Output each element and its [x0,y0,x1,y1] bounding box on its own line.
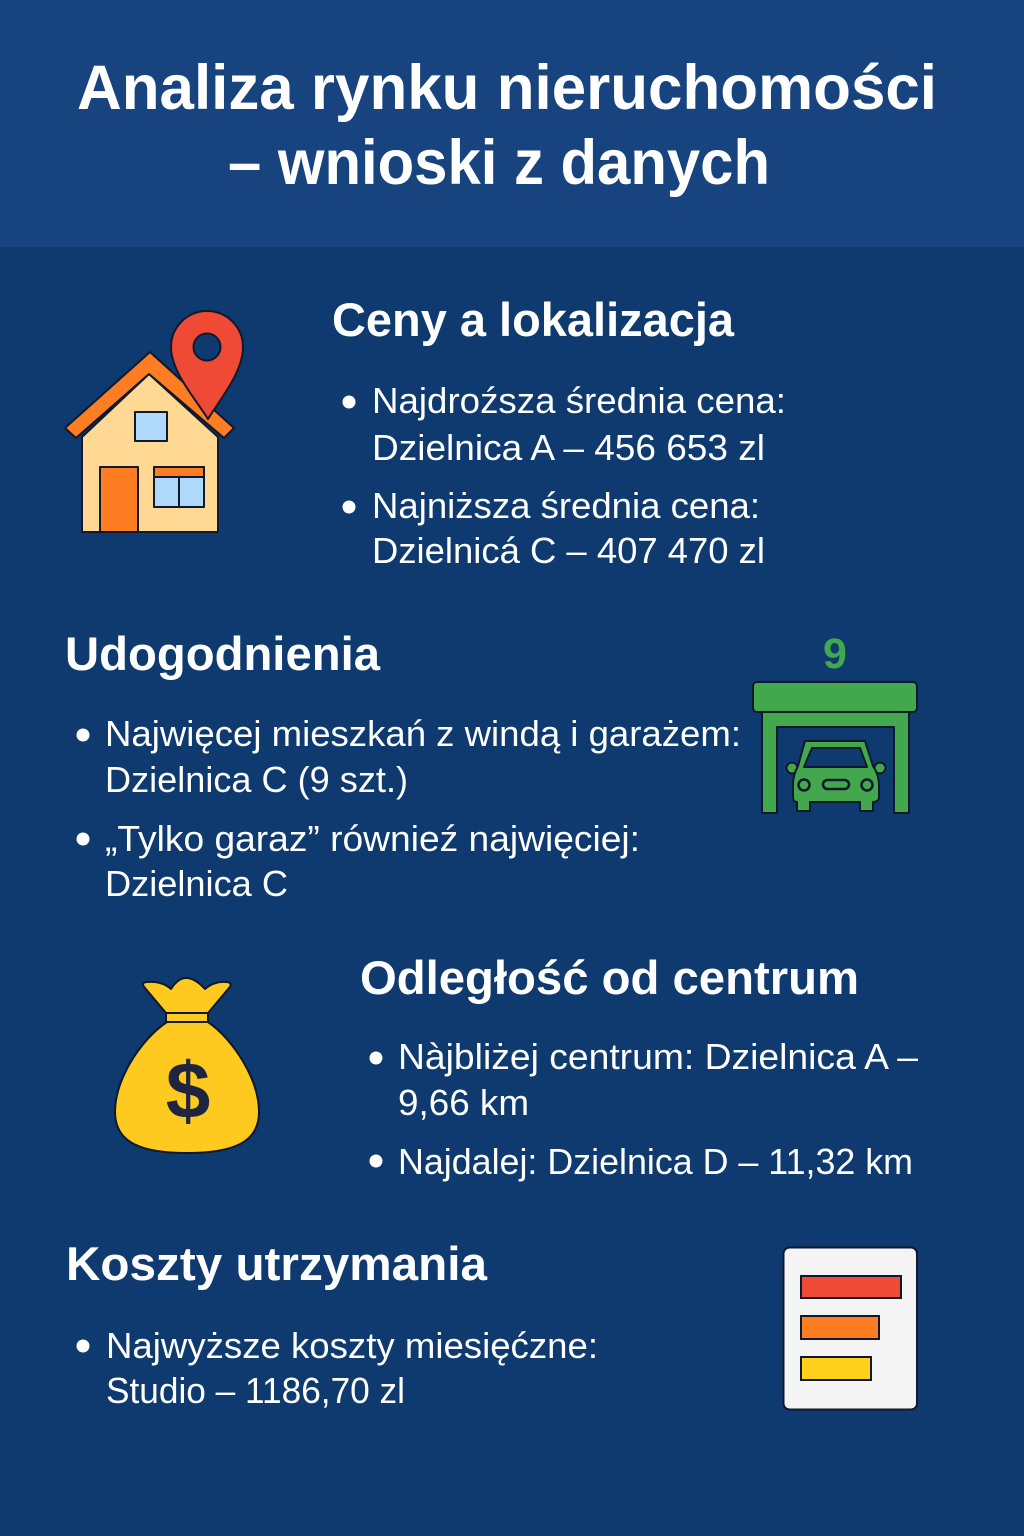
bullet list: udogodnienia [76,713,741,904]
panel: udogodnienia [65,627,917,904]
bullet list: odległość: Nàjbliżej centrum: Dzielnica A – [398,1036,918,1077]
panel: odległość od centrum [115,951,918,1182]
icon: green garage with car and number 9: 9 [823,630,847,678]
bullet list: odległość [370,1036,918,1182]
bullet list: udogodnienia: „Tylko garaz” równieź najwięciej: [105,818,640,859]
heading: odległość od centrum: Odległość od centrum [360,951,859,1004]
bullet list: koszty [76,1325,598,1411]
header band with title: Analiza rynku nieruchomości [77,53,937,123]
icon: money bag: $ [166,1046,210,1135]
bullet list: ceny: Dzielnicá C – 407 470 zl [372,530,765,571]
bullet list: koszty: Studio – 1186,70 zl [106,1370,405,1411]
panel: koszty utrzymania [66,1237,917,1411]
bullet list: ceny: Dzielnica A – 456 653 zl [372,427,765,468]
icon: house with location pin [65,311,243,532]
heading: koszty utrzymania: Koszty utrzymania [66,1237,488,1290]
icon: money bag [115,978,259,1153]
heading: udogodnienia: Udogodnienia [65,627,381,680]
bullet list: odległość: 9,66 km [398,1082,529,1123]
icon: green garage with car and number 9 [753,630,917,813]
icon: report card with bars [784,1248,917,1410]
header band with title [0,0,1024,247]
panel: ceny a lokalizacja [65,293,786,571]
heading: ceny a lokalizacja: Ceny a lokalizacja [332,293,735,346]
bullet list: koszty: Najwyższe koszty miesięćzne: [106,1325,598,1366]
bullet list: ceny [342,380,786,571]
bullet list: udogodnienia: Najwięcej mieszkań z windą i garażem: [105,713,741,754]
bullet list: ceny: Najniższa średnia cena: [372,485,760,526]
bullet list: ceny: Najdroźsza średnia cena: [372,380,786,421]
bullet list: udogodnienia: Dzielnica C [105,863,288,904]
header band with title: – wnioski z danych [228,128,770,198]
bullet list: udogodnienia: Dzielnica C (9 szt.) [105,759,408,800]
bullet list: odległość: Najdalej: Dzielnica D – 11,32 km [398,1141,913,1182]
